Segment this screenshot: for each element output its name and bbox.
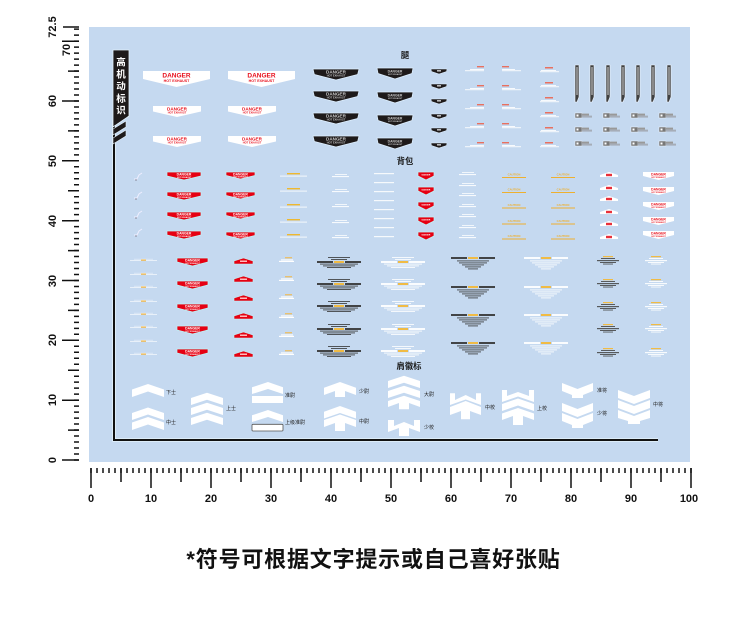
white danger chevrons, large: HOT EXHAUST [168,140,187,144]
red danger chevrons, column 2: HOT EXHAUST [233,196,248,199]
black danger chevrons, column 2: HOT EXHAUST [388,73,403,76]
caution text, column 2: CAUTION [557,219,569,223]
black danger chevrons, column 1: HOT EXHAUST [327,118,346,122]
red danger chevrons, column 1: DANGER [177,212,192,216]
caution text, column 2: CAUTION [557,234,569,238]
caution text, column 1 [502,172,526,240]
red danger shields [418,172,434,240]
banner: vertical title [113,50,129,144]
caution text, column 2: CAUTION [557,172,569,176]
black danger chevrons, column 2 [377,68,413,149]
banner: vertical title: 动 [116,82,126,92]
red danger chevrons, row 3: DANGER [185,326,200,330]
gold and white caution lines [280,173,307,238]
shoulder insignia: sergeants: 上士 [226,405,236,412]
black danger chevrons, small [431,69,447,148]
black danger chevrons, column 1: DANGER [326,114,347,118]
white danger chevrons, large: DANGER [167,106,188,112]
y axis ruler: 50 [47,155,59,167]
x axis ruler: 100 [680,493,698,505]
x axis ruler: 90 [625,493,637,505]
white text lines, column 1 [332,174,349,238]
shoulder insignia: colonels: 上校 [537,405,547,412]
dark warning bars [317,257,361,357]
white small arched decals [600,172,618,239]
red danger shields: DANGER [422,203,431,206]
white danger chevrons, large: HOT EXHAUST [243,110,262,114]
red danger chevrons, column 2: DANGER [233,212,248,216]
x axis ruler [88,468,698,505]
shoulder insignia: lieutenants: 少尉 [359,388,369,395]
white chevrons with red text: DANGER [651,232,666,236]
red danger chevrons, column 1: DANGER [177,172,192,176]
x axis ruler: 10 [145,493,157,505]
y axis ruler [47,16,79,463]
footer note: *符号可根据文字提示或自己喜好张贴 [186,547,561,572]
white danger chevrons, large [143,71,295,147]
black danger chevrons, column 2: HOT EXHAUST [388,120,403,123]
red danger chevrons, row 3: HOT EXHAUST [185,353,200,356]
red danger chevrons, row 3: HOT EXHAUST [185,262,200,265]
caution text, column 2: CAUTION [557,188,569,192]
white danger chevrons, large: HOT EXHAUST [243,140,262,144]
black danger chevrons, column 1: DANGER [326,136,347,142]
red danger chevrons, column 2 [226,172,255,239]
pale decals with red bars, column 3 [540,67,559,147]
shoulder insignia: lieutenants [324,382,369,431]
red danger chevrons, column 1: HOT EXHAUST [177,235,192,238]
small white gold decals [279,257,294,355]
dark text clusters [597,256,619,356]
shoulder insignia: sergeants: 下士 [166,389,176,396]
heading: backpack: 背包 [397,156,414,166]
red danger chevrons, row 3: DANGER [185,258,200,262]
white danger chevrons, large: DANGER [242,106,263,112]
x axis ruler: 50 [385,493,397,505]
red danger shields: DANGER [422,233,431,236]
black danger chevrons, column 1 [313,69,359,147]
y axis ruler: 0 [47,457,59,463]
shoulder insignia: captain and major [388,376,434,436]
red danger chevrons, column 1: HOT EXHAUST [177,176,192,179]
shoulder insignia: generals: 准将 [597,387,607,394]
y axis ruler: 70 [61,44,73,56]
black danger chevrons, column 1: DANGER [326,70,347,74]
red danger chevrons, column 2: DANGER [233,172,248,176]
red danger chevrons, column 1: HOT EXHAUST [177,196,192,199]
black danger chevrons, column 2: DANGER [388,116,403,120]
y axis ruler: 60 [47,95,59,107]
caution text, column 1: CAUTION [508,219,520,223]
red danger shields: DANGER [422,218,431,221]
white chevrons with red text: DANGER [651,172,666,176]
shoulder insignia: warrant officers: 准尉 [285,392,295,399]
red danger chevrons, column 2: DANGER [233,192,248,196]
red danger chevrons, row 3: HOT EXHAUST [185,285,200,288]
white single lines [374,173,394,237]
shoulder insignia: warrant officers: 上级准尉 [285,419,305,426]
shoulder insignia: sergeants: 中士 [166,419,176,426]
white danger chevrons, large: DANGER [247,72,276,80]
caution text, column 1: CAUTION [508,234,520,238]
white chevrons with red text: HOT EXHAUST [651,206,666,209]
swoosh icons [134,173,142,236]
red danger chevrons, column 2: HOT EXHAUST [233,236,248,239]
red danger chevrons, column 2: HOT EXHAUST [233,216,248,219]
red danger chevrons, column 1 [167,172,201,239]
dark warning bars with long text [451,257,495,354]
white chevrons with red text: HOT EXHAUST [651,221,666,224]
frame line inner [114,120,658,440]
red danger chevrons, row 3: HOT EXHAUST [185,330,200,333]
pale decals with red bars, column 2 [502,66,521,147]
x axis ruler: 70 [505,493,517,505]
white danger chevrons, large: DANGER [167,136,188,142]
shoulder insignia: warrant officers [252,382,305,431]
white chevrons with red text: HOT EXHAUST [651,176,666,179]
y axis ruler: 20 [47,334,59,346]
caution text, column 2: CAUTION [557,203,569,207]
white chevrons with red text: DANGER [651,218,666,222]
black danger chevrons, column 2: DANGER [388,140,403,144]
shoulder insignia: colonels: 中校 [485,404,495,411]
banner: vertical title: 识 [116,106,126,116]
white chevrons with red text: HOT EXHAUST [651,235,666,238]
red danger chevrons, row 3: DANGER [185,282,200,286]
y axis ruler: 72.5 [47,16,59,38]
red danger chevrons, column 1: DANGER [177,232,192,236]
y axis ruler: 30 [47,275,59,287]
background panel [89,27,690,462]
x axis ruler: 40 [325,493,337,505]
red danger chevrons, column 1: HOT EXHAUST [177,216,192,219]
shoulder insignia: lieutenants: 中尉 [359,418,369,425]
shoulder insignia: colonels [450,390,547,425]
wispy white lines with gold centre [130,259,157,355]
banner: vertical title: 标 [116,93,126,105]
white text clusters [645,256,667,356]
white danger chevrons, large: DANGER [162,72,191,80]
red danger shields: DANGER [422,188,431,191]
white chevrons with red text: DANGER [651,188,666,192]
caution text, column 2 [551,172,575,240]
black danger chevrons, column 2: DANGER [388,94,403,98]
caution text, column 1: CAUTION [508,188,520,192]
black danger chevrons, column 1: HOT EXHAUST [327,96,346,100]
black danger chevrons, column 2: DANGER [388,70,403,74]
white text blocks [459,172,476,238]
frame line [114,120,658,440]
white chevrons with red text: HOT EXHAUST [651,191,666,194]
shoulder insignia: generals [562,383,663,428]
x axis ruler: 20 [205,493,217,505]
heading: shoulder insignia: 肩徽标 [397,361,422,371]
y axis ruler: 40 [47,215,59,227]
shoulder insignia: generals: 少将 [597,410,607,417]
black danger chevrons, column 2: HOT EXHAUST [388,97,403,100]
red danger chevrons, column 2: DANGER [233,232,248,236]
banner: vertical title: 机 [116,68,126,80]
x axis ruler: 0 [88,493,94,505]
white danger chevrons, large: HOT EXHAUST [249,79,275,83]
shoulder insignia: generals: 中将 [653,401,663,408]
red danger shields: DANGER [422,173,431,176]
white chevrons with red text [643,172,674,239]
red danger chevrons, column 2: HOT EXHAUST [233,176,248,179]
vertical grey strips [575,65,671,102]
white warning bars [381,257,425,357]
black danger chevrons, column 1: HOT EXHAUST [327,74,346,78]
white danger chevrons, large: DANGER [242,136,263,142]
red danger chevrons, row 3: DANGER [185,350,200,354]
black danger chevrons, column 1: DANGER [326,92,347,96]
black danger chevrons, column 2: HOT EXHAUST [388,143,403,146]
white danger chevrons, large: HOT EXHAUST [168,110,187,114]
pale decals with red bars, column 1 [465,66,484,147]
shoulder insignia: captain and major: 大尉 [424,391,434,398]
black danger chevrons, column 1: HOT EXHAUST [327,140,346,144]
white danger chevrons, large: HOT EXHAUST [164,79,190,83]
red danger chevrons, column 1: DANGER [177,192,192,196]
white chevrons with red text: DANGER [651,202,666,206]
red danger chevrons, row 3: HOT EXHAUST [185,308,200,311]
white warning bars with long text [524,257,568,354]
caution text, column 1: CAUTION [508,172,520,176]
x axis ruler: 30 [265,493,277,505]
red danger chevrons, row 3: DANGER [185,304,200,308]
red danger chevrons, row 3 [177,258,208,357]
grey small blocks [575,113,676,146]
shoulder insignia: captain and major: 少校 [424,424,434,431]
y axis ruler: 10 [47,394,59,406]
heading: leg: 腿 [401,50,410,60]
x axis ruler: 60 [445,493,457,505]
banner: vertical title: 高 [116,56,126,68]
red upward decals [234,258,253,357]
x axis ruler: 80 [565,493,577,505]
caution text, column 1: CAUTION [508,203,520,207]
shoulder insignia: sergeants [132,384,236,430]
